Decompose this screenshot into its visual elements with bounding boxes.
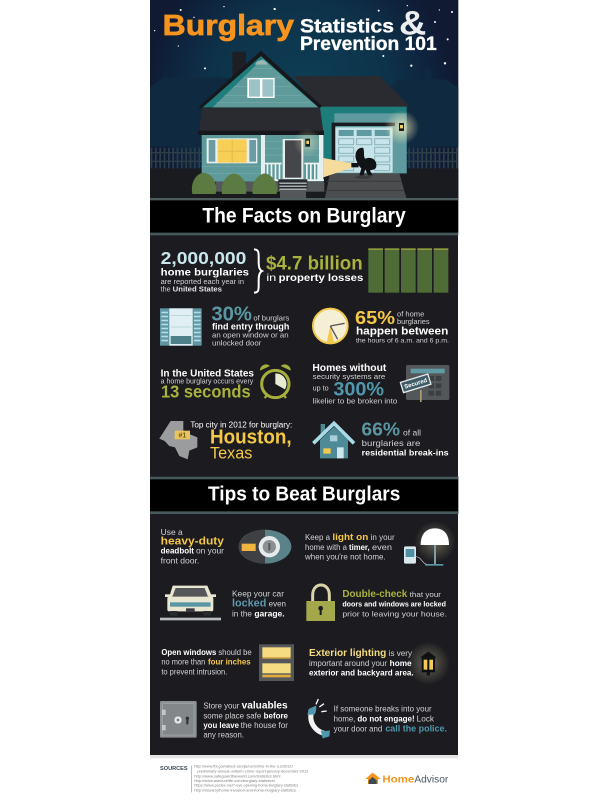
stat: 30% xyxy=(211,304,290,347)
stat: 2,000,000 burglaries: are reported each year in xyxy=(161,279,244,286)
tip: car locked: even xyxy=(269,600,286,609)
bushes xyxy=(192,173,277,194)
tip: car locked: garage. xyxy=(254,609,285,618)
tip: open windows: four inches xyxy=(208,657,251,667)
garage xyxy=(332,123,395,173)
tip: exterior lighting: is very xyxy=(389,649,412,658)
stat: 65%: burglaries xyxy=(397,319,430,326)
stat: 66% xyxy=(361,418,449,457)
stat: 66%: residential break-ins xyxy=(362,447,449,457)
stat: 300%: 300% xyxy=(333,379,384,400)
icon: car xyxy=(160,586,221,620)
tip: deadbolt: Use a xyxy=(161,527,183,537)
stat: 65%: 65% xyxy=(355,307,395,328)
stat: 2,000,000 burglaries: United States xyxy=(173,287,222,294)
stat: 30%: unlocked door xyxy=(212,338,262,347)
stat: 2,000,000 burglaries: the xyxy=(161,287,171,294)
icon: Texas map: #1 xyxy=(178,433,186,440)
stat: $4.7 billion xyxy=(266,253,364,284)
tip: exterior lighting: important around your xyxy=(309,659,387,668)
sources: http://www.safeguardtheworld.com/statistics.html xyxy=(194,774,281,778)
icon: telephone xyxy=(307,699,330,738)
band: Tips to Beat Burglars xyxy=(150,477,458,514)
stars xyxy=(154,5,453,69)
stat: 13 seconds: 13 seconds xyxy=(161,382,251,402)
tip: exterior lighting: Exterior lighting xyxy=(309,648,386,659)
tip: deadbolt: front door. xyxy=(161,556,199,566)
tip: valuables: any reason. xyxy=(203,730,244,740)
tip: light on timer: timer, xyxy=(349,543,370,552)
tip: open windows: should be xyxy=(218,647,252,657)
tip: car locked xyxy=(232,589,286,618)
tip: exterior lighting xyxy=(309,648,414,678)
icon: alarm clock xyxy=(260,364,291,398)
panel bottom edge xyxy=(150,755,458,758)
icon: open window xyxy=(259,644,294,681)
house xyxy=(192,51,409,199)
band: Tips to Beat Burglars: Tips to Beat Burglars xyxy=(208,483,400,505)
stat: 66%: 66% xyxy=(361,418,400,439)
stat: 30%: 30% xyxy=(211,304,252,326)
icon: house xyxy=(313,423,354,458)
tip: exterior lighting: exterior and backyard area. xyxy=(309,668,414,678)
tip: police: do not engage! xyxy=(357,714,415,724)
ground xyxy=(150,168,458,199)
picket fences xyxy=(150,148,458,168)
title: Burglary xyxy=(163,10,294,42)
front door xyxy=(283,139,303,179)
stat: 65% xyxy=(355,307,449,344)
tip: light on timer: when you're not home. xyxy=(304,553,386,562)
tip: double-check: prior to leaving your house. xyxy=(342,609,447,618)
brace xyxy=(254,249,262,293)
porch steps xyxy=(278,179,307,190)
icon: padlock xyxy=(306,585,335,621)
burglar xyxy=(351,148,376,175)
icon: security panel with sign xyxy=(400,365,449,402)
tip: car locked: locked xyxy=(232,598,266,610)
stat: 300%: up to xyxy=(313,386,329,393)
sources: http://visual.ly/home-invasion-and-home-burglary-statistics xyxy=(194,788,296,792)
stat: $4.7 billion: $4.7 billion xyxy=(266,253,363,274)
porch railings xyxy=(260,163,324,181)
tips row 1 and 2 xyxy=(160,521,456,621)
tip: light on timer: home with a xyxy=(305,543,348,552)
tip: deadbolt: heavy-duty xyxy=(161,536,225,548)
icon: deadbolt xyxy=(239,530,291,564)
driveway xyxy=(325,173,407,199)
lit window xyxy=(207,138,257,163)
icon: exterior lantern xyxy=(407,642,450,685)
tip: double-check: doors and windows are locked xyxy=(342,602,446,609)
tip: light on timer: Keep a xyxy=(305,533,331,542)
tip: double-check: Double-check xyxy=(342,589,408,600)
tip: valuables: you leave xyxy=(203,720,239,730)
stat: 65%: of home xyxy=(397,312,424,319)
tip: car locked: in the xyxy=(232,609,253,618)
hero panel: night house scene xyxy=(150,0,458,200)
tip: deadbolt: deadbolt xyxy=(161,547,194,556)
tip: police: home, xyxy=(334,714,355,724)
stat: 300%: Homes without xyxy=(312,363,387,374)
tip: valuables: valuables xyxy=(242,700,288,711)
tip: police: Lock xyxy=(417,714,435,724)
tip: deadbolt: on your xyxy=(196,547,224,556)
sources: http://www.asecurelife.com/burglary-statistics/ xyxy=(194,779,276,783)
stat: 65%: happen between xyxy=(356,325,448,337)
title: Statistics xyxy=(300,17,394,38)
facts row 1 and 2 xyxy=(160,248,449,347)
stat: $4.7 billion: property losses xyxy=(279,273,364,284)
tip: light on timer: even xyxy=(372,543,392,552)
stat: 30%: of burglars xyxy=(253,316,290,323)
stat: 66%: of all xyxy=(403,427,421,437)
title xyxy=(163,4,437,55)
stat: Houston, Texas: Top city in 2012 for burglary: xyxy=(190,420,292,429)
tip: open windows xyxy=(161,647,252,676)
stat: Houston, Texas: Texas xyxy=(210,444,252,463)
stat: 2,000,000 burglaries: 2,000,000 xyxy=(161,248,246,268)
tip: light on timer xyxy=(304,532,395,562)
stat: Houston, Texas xyxy=(190,420,292,463)
band: The Facts on Burglary: The Facts on Burglary xyxy=(202,204,406,228)
tip: open windows: Open windows xyxy=(161,647,217,657)
tip: valuables xyxy=(203,700,288,740)
stat: 2,000,000 burglaries: home burglaries xyxy=(161,267,249,278)
tip: police: your door and xyxy=(334,724,383,734)
tips row 3 and 4 xyxy=(150,642,458,792)
tip: valuables: the house for xyxy=(241,720,288,730)
tip: double-check xyxy=(342,589,447,618)
tip: police: call the police. xyxy=(385,724,447,734)
stat: 300%: security systems are xyxy=(313,372,385,381)
tip: exterior lighting: home xyxy=(390,658,412,668)
icon: safe xyxy=(160,701,197,738)
tip: valuables: Store your xyxy=(203,700,240,710)
stat: 13 seconds: In the United States xyxy=(161,368,254,379)
sources: http://www.fbi.gov/about-us/cjis/ucr/crime-in-the-u.s/2012/ xyxy=(194,765,294,769)
title: & xyxy=(399,4,426,42)
stat: $4.7 billion: in xyxy=(266,273,276,284)
tip: valuables: some place safe xyxy=(203,710,262,720)
logo: HomeAdvisor: Home xyxy=(382,774,415,785)
tip: double-check: that your xyxy=(410,590,441,599)
tip: deadbolt xyxy=(161,527,225,566)
title: Prevention 101 xyxy=(300,34,437,55)
stat: Houston, Texas: Houston, xyxy=(210,427,292,449)
icon: Texas map xyxy=(159,421,197,459)
flashlight beam xyxy=(323,158,352,177)
tip: police xyxy=(334,704,447,734)
sources: preliminary-annual-uniform-crime-report-january-december-2012 xyxy=(197,770,308,774)
stat: 2,000,000 burglaries xyxy=(161,248,249,294)
tip: car locked: Keep your car xyxy=(232,589,284,598)
tip: valuables: before xyxy=(264,710,288,720)
facts row 3 and 4 xyxy=(150,363,458,514)
porch and garage lights xyxy=(294,110,419,157)
icon: money stacks xyxy=(368,248,448,293)
tip: open windows: to prevent intrusion. xyxy=(161,666,227,676)
icon: window with shutters xyxy=(160,308,202,346)
icon: clock xyxy=(313,309,348,343)
section panel background xyxy=(150,198,458,755)
icon: lamp and timer xyxy=(404,521,456,566)
tip: light on timer: light on xyxy=(332,532,369,542)
stat: 30%: find entry through xyxy=(212,321,290,331)
band: The Facts on Burglary xyxy=(150,198,458,235)
stat: 30%: an open window or an xyxy=(212,330,289,339)
tip: open windows: no more than xyxy=(161,657,206,667)
icon: security panel with sign: Secured xyxy=(404,378,428,391)
sources: https://www.pozlex.me/7-eye-opening-home-burglary-statistics xyxy=(194,784,299,788)
sources: SOURCES xyxy=(160,766,188,772)
sources xyxy=(160,765,308,792)
stat: 13 seconds: a home burglary occurs every xyxy=(161,378,254,385)
tip: police: If someone breaks into your xyxy=(334,704,432,714)
logo: HomeAdvisor: Advisor xyxy=(414,774,449,785)
logo: HomeAdvisor xyxy=(365,773,449,785)
stat: 66%: burglaries are xyxy=(362,438,421,448)
stat: 300% xyxy=(312,363,397,405)
stat: 13 seconds xyxy=(161,368,254,402)
stat: 65%: the hours of 6 a.m. and 6 p.m. xyxy=(356,337,449,344)
neighbourhood silhouettes xyxy=(150,66,458,147)
stat: 300%: likelier to be broken into xyxy=(313,396,397,405)
tip: light on timer: in your xyxy=(371,533,395,542)
